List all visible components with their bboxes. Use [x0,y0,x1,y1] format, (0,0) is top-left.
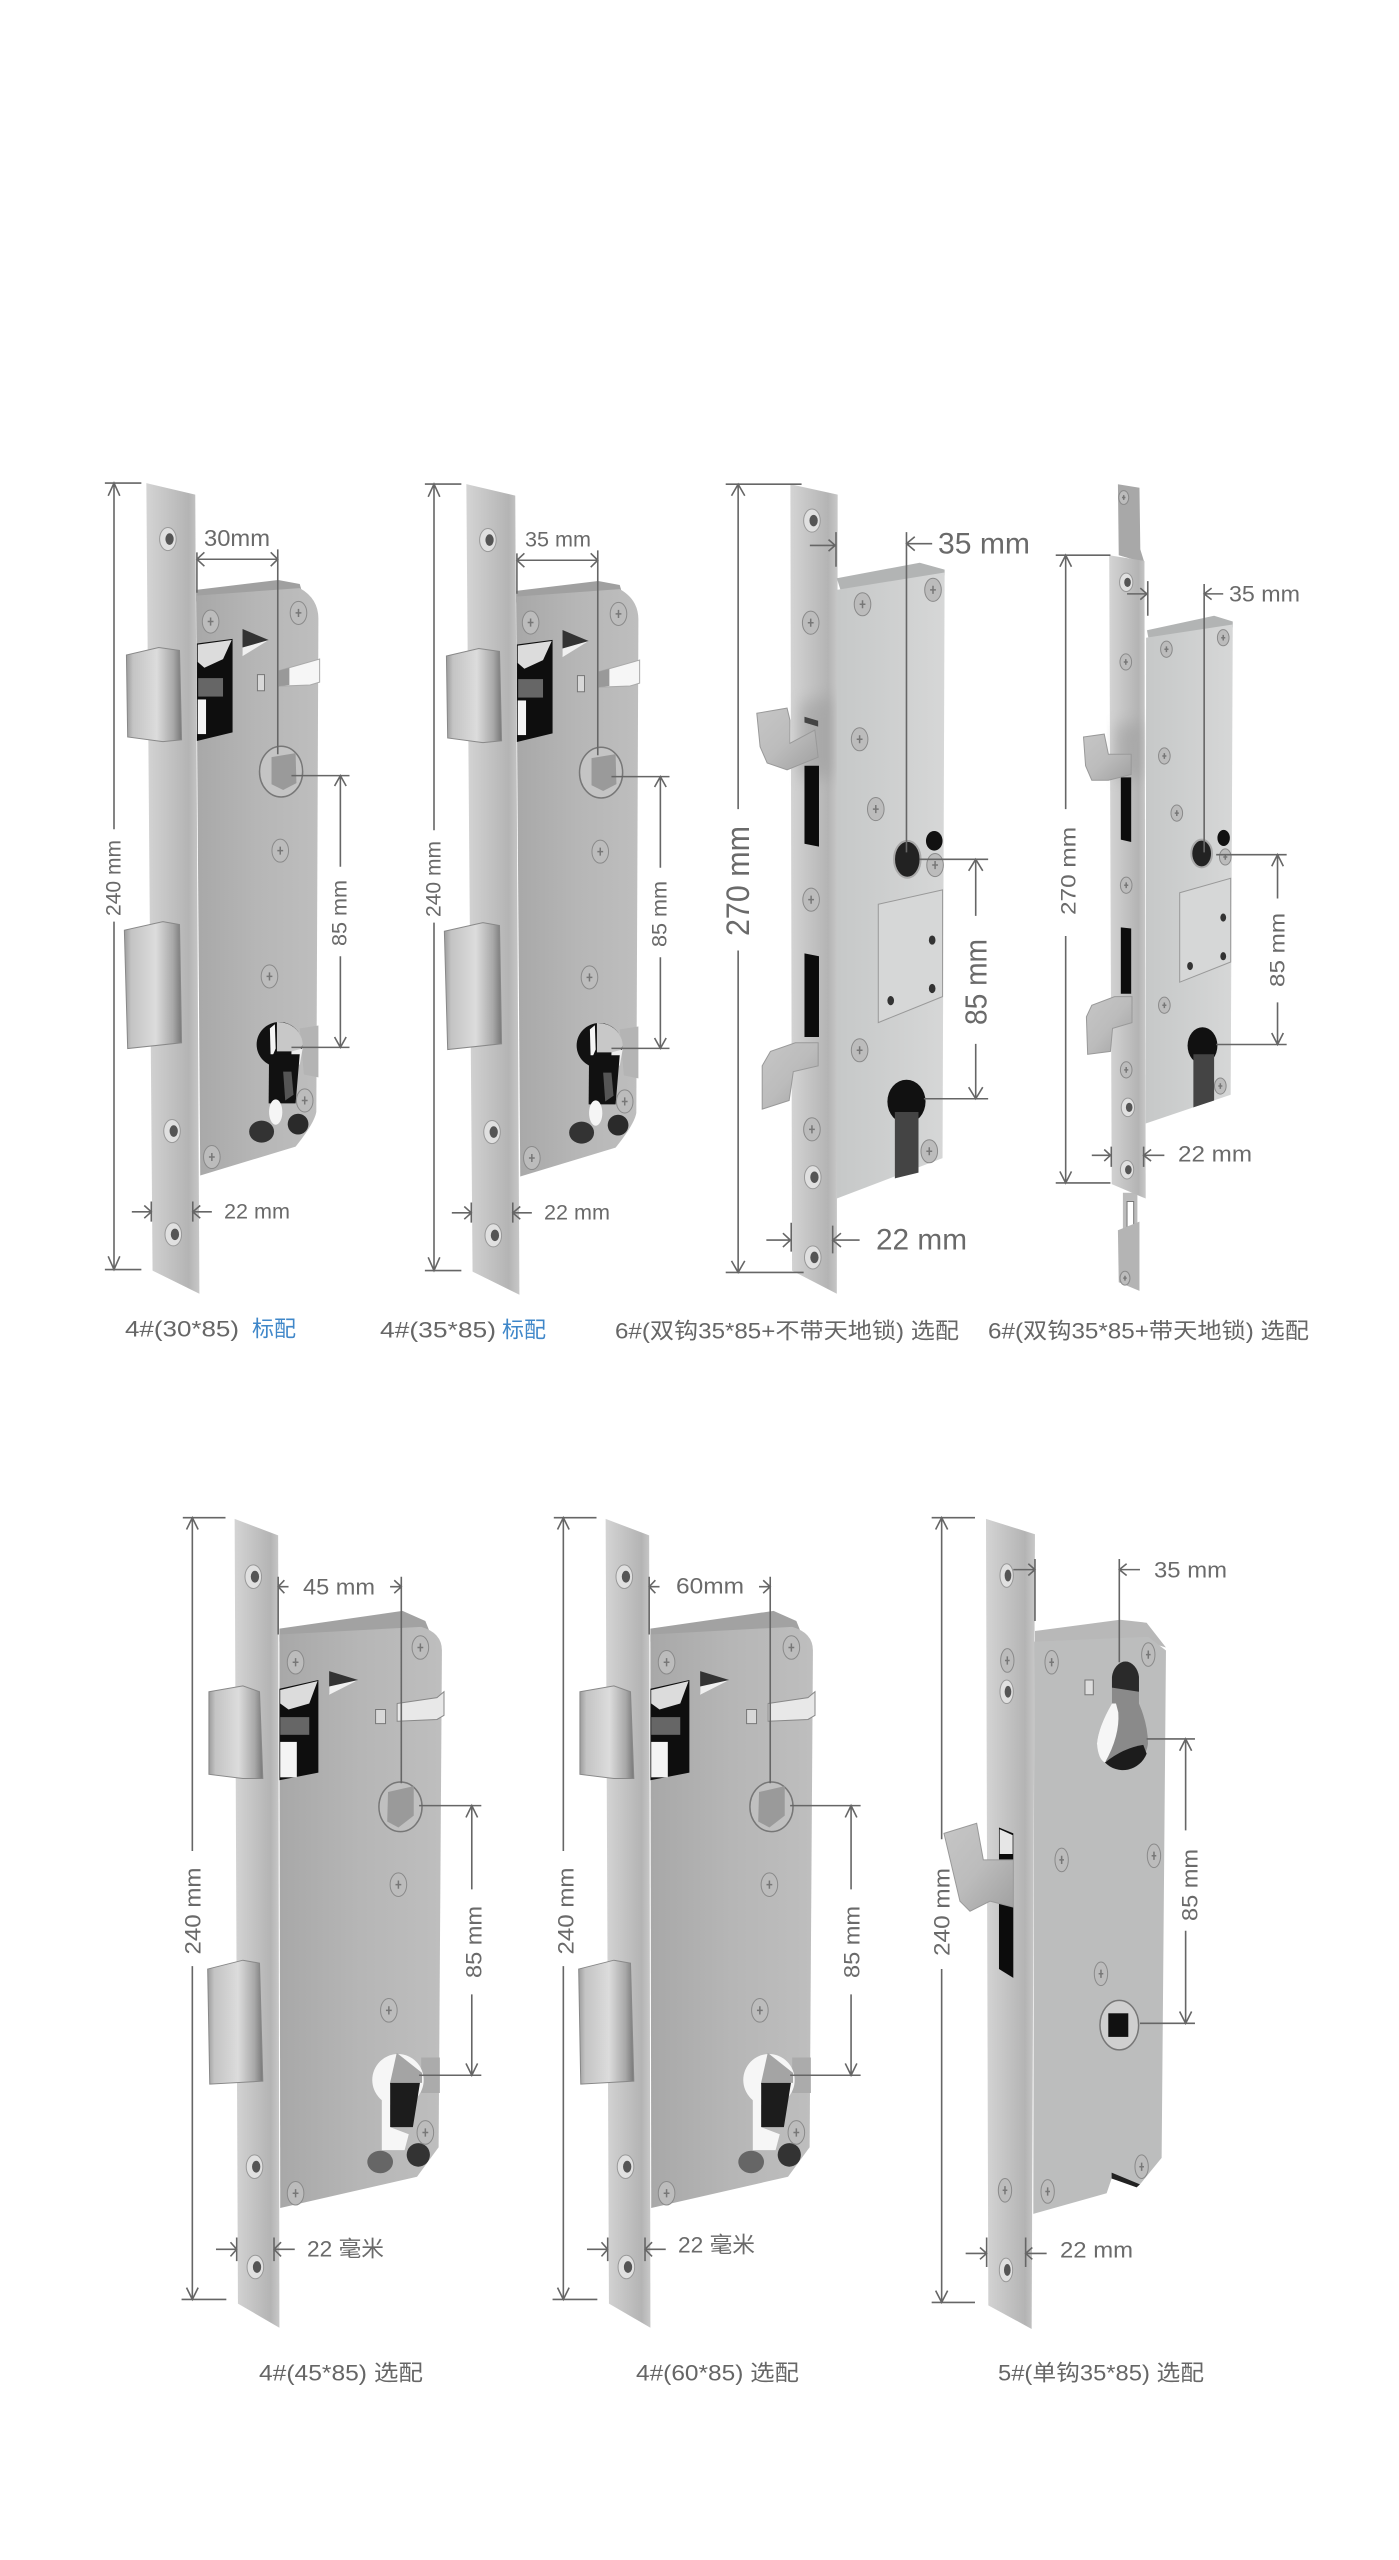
label: 270 mm height: 270 mm [1058,827,1080,915]
dimension lines [553,1518,861,2299]
label: 85 mm centre: 85 mm [1266,913,1290,987]
label: 240 mm height: 240 mm [422,841,446,917]
label: 270 mm height: 270 mm [720,826,756,936]
label: 240 mm height: 240 mm [180,1868,206,1954]
caption: 5#(单钩35*85) 选配 [998,2360,1204,2386]
lock illustration [757,484,945,1294]
panel: lock 5# single hook 35*85 [930,1518,1227,2386]
label: 22 mm faceplate: 22 毫米 [678,2232,755,2258]
caption: 4#(30*85) [125,1316,239,1342]
label: 30 mm backset: 30mm [204,525,270,551]
label: 22 mm faceplate: 22 毫米 [307,2236,384,2262]
label: 240 mm height: 240 mm [554,1868,578,1954]
label: 35 mm backset: 35 mm [525,528,591,552]
dimension lines [182,1518,481,2299]
caption: 6#(双钩35*85+带天地锁) 选配 [988,1318,1309,1344]
lock illustration [579,1519,815,2328]
label: 85 mm centre: 85 mm [840,1906,864,1978]
lock illustration [124,483,320,1294]
caption: 4#(45*85) 选配 [259,2360,423,2386]
dimension lines [932,1518,1195,2302]
dimension lines [1056,555,1287,1183]
panel: lock 4# 35*85 [380,484,672,1343]
label: 35 mm backset: 35 mm [938,528,1030,560]
panel: lock 4# 45*85 [180,1518,486,2386]
label: 60 mm backset: 60mm [676,1574,744,1598]
label: 240 mm height: 240 mm [930,1868,954,1956]
label: 22 mm faceplate: 22 mm [1178,1142,1252,1166]
label: 85 mm centre: 85 mm [1178,1849,1202,1921]
caption: 标配 [252,1316,296,1342]
caption [125,1316,296,1342]
caption: 4#(35*85) [380,1318,496,1342]
label: 35 mm backset: 35 mm [1154,1558,1227,1582]
lock illustration [444,484,640,1295]
lock illustration [944,1519,1166,2329]
panel: lock 4# 30*85 [102,483,352,1342]
label: 45 mm backset: 45 mm [303,1574,375,1600]
caption: 4#(60*85) 选配 [636,2360,799,2386]
label: 22 mm faceplate: 22 mm [876,1224,967,1256]
label: 22 mm faceplate: 22 mm [1060,2238,1133,2262]
label: 22 mm faceplate: 22 mm [544,1202,610,1224]
label: 85 mm centre: 85 mm [462,1906,486,1978]
panel: lock 4# 60*85 [553,1518,864,2386]
panel: lock 6# double hook without top and bottom bolts [615,484,1030,1344]
dimension lines [726,484,988,1272]
label: 85 mm centre: 85 mm [648,881,672,947]
caption: 标配 [502,1318,546,1342]
label: 35 mm backset: 35 mm [1229,582,1300,606]
lock illustration [208,1519,444,2328]
caption: 6#(双钩35*85+不带天地锁) 选配 [615,1318,959,1344]
panel: lock 6# double hook with top and bottom bolts [988,484,1309,1344]
label: 85 mm centre: 85 mm [958,939,994,1025]
dimension lines [105,483,349,1270]
lock illustration [1084,484,1233,1291]
dimension lines [425,484,669,1271]
caption [380,1318,546,1342]
label: 240 mm height: 240 mm [102,840,126,916]
label: 22 mm faceplate: 22 mm [224,1200,290,1224]
label: 85 mm centre: 85 mm [328,880,352,946]
